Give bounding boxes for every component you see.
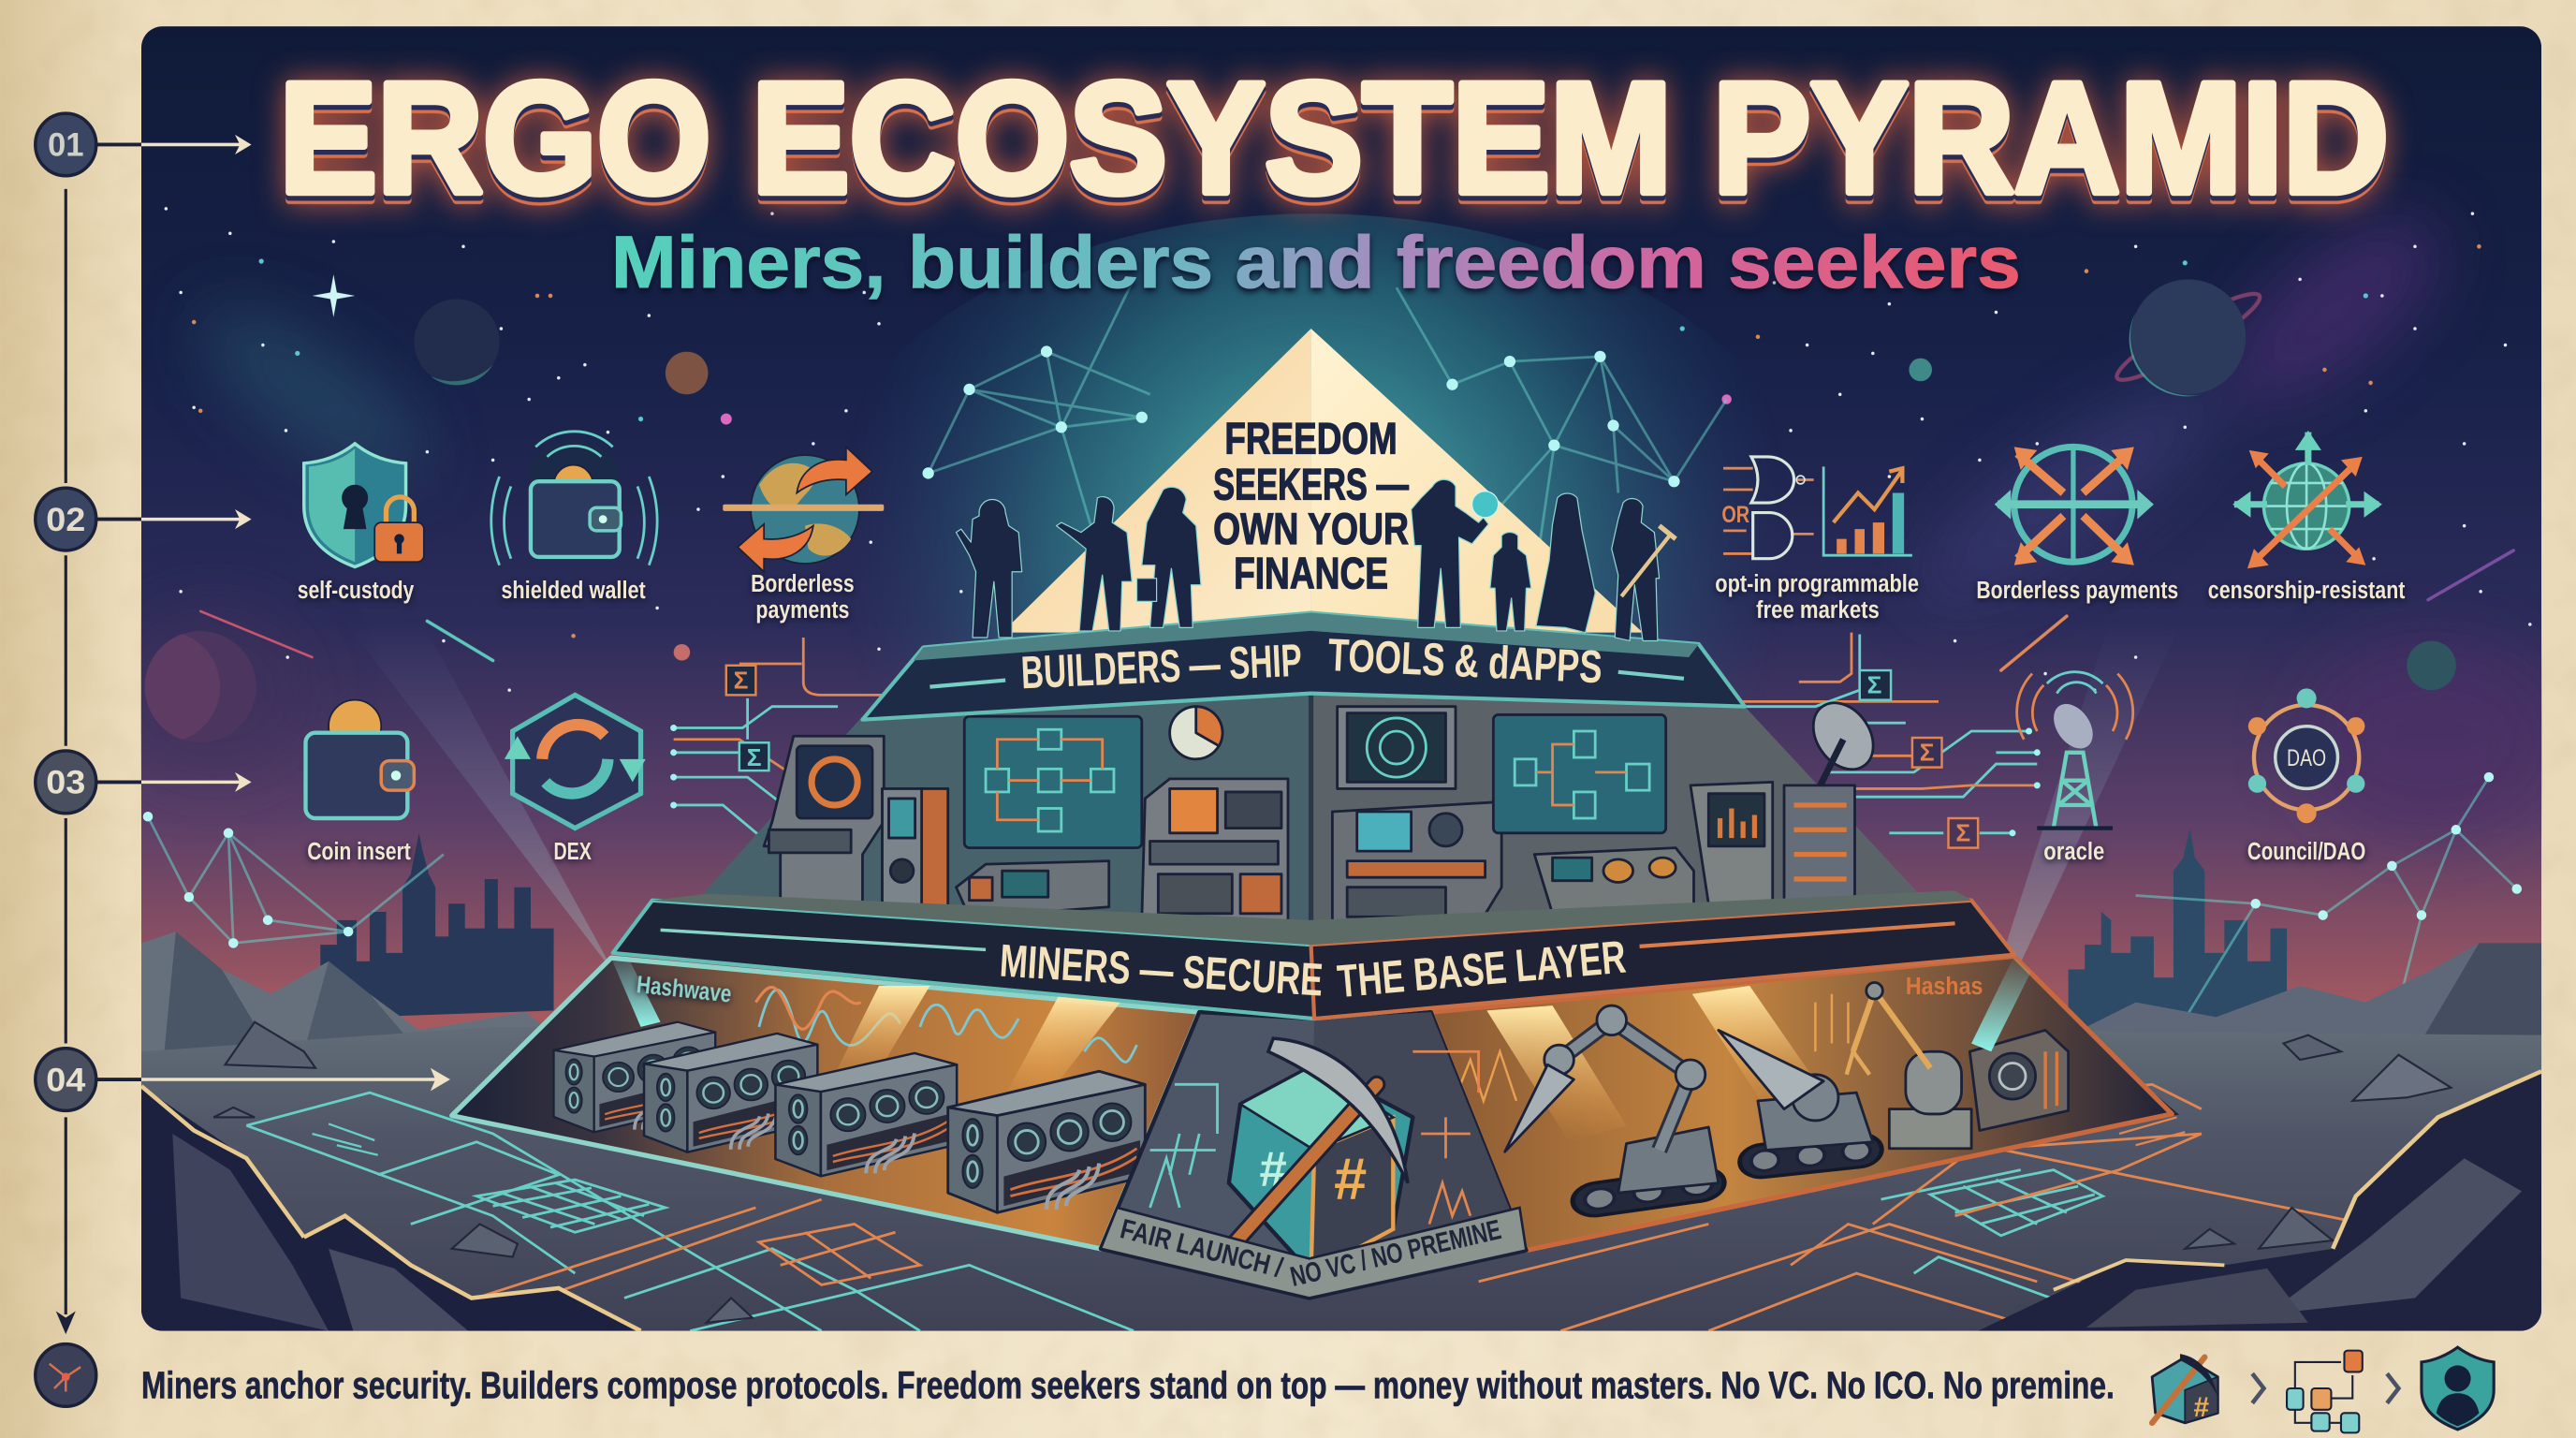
server rig right (1969, 1030, 2069, 1130)
icon: hash cube and pickaxe: # (1334, 1147, 1367, 1212)
circuit traces beside the builders tier (674, 633, 2037, 846)
subtitle: Miners, builders and freedom seekers (611, 221, 2021, 303)
label: self-custody: self-custody (298, 576, 415, 604)
machine: right terminal and server (1690, 782, 1854, 903)
icon: council DAO: DAO (2287, 746, 2326, 771)
small rocks (213, 1022, 2452, 1323)
machine: large flow screen (964, 716, 1142, 848)
footer icons (2152, 1347, 2494, 1432)
apex heading: OWN YOUR (1213, 505, 1409, 554)
machine: gauge and centre console (1142, 707, 1288, 925)
label: borderless payments left (751, 569, 855, 624)
title: ERGO ECOSYSTEM PYRAMID (279, 49, 2389, 226)
sigma nodes: Σ (747, 743, 762, 771)
icon: council DAO (2248, 688, 2364, 823)
tier: freedom seekers apex (1003, 329, 1643, 633)
drilling robot: cone (1719, 1030, 1883, 1180)
timeline: numbered steps (36, 113, 450, 1406)
label: borderless payments right: Borderless payments (1976, 576, 2178, 604)
ground circuit: teal (246, 1093, 2102, 1331)
label: censorship-resistant: censorship-resistant (2208, 576, 2406, 604)
planets (109, 279, 2456, 742)
constellations: lower left and right (148, 777, 2517, 1030)
label: coin insert: Coin insert (307, 837, 411, 865)
apex heading (1213, 414, 1409, 598)
label: borderless payments left: Borderless (751, 569, 855, 597)
sigma nodes: Σ (1920, 739, 1935, 767)
label: hashas: Hashas (1906, 972, 1983, 1000)
tier: miners chamber left (452, 949, 1199, 1249)
tier: miners centre panel (1101, 1012, 1526, 1298)
apex teal glow (904, 213, 1726, 648)
icon: logic gates and chart: OR (1721, 503, 1749, 528)
constellations: around the apex (923, 283, 1728, 539)
icon: DEX swap hexagon (505, 695, 646, 829)
tier: miners band (613, 890, 2014, 1019)
label: oracle: oracle (2043, 837, 2104, 865)
label strip: fair launch (1101, 1208, 1526, 1298)
step 02: 02 (46, 502, 85, 538)
label: shielded wallet: shielded wallet (501, 576, 646, 604)
label: hashwave: Hashwave (636, 970, 733, 1008)
miners heading (998, 932, 1628, 1007)
pyramid (452, 329, 2172, 1298)
connector rail (65, 189, 66, 1314)
icon: oracle tower (2017, 672, 2133, 829)
step 04 (36, 1049, 450, 1110)
tier: builders band (862, 613, 1745, 720)
label: borderless payments left: payments (755, 595, 849, 624)
machine: right console (1332, 801, 1501, 925)
icon group: left lower row (305, 695, 646, 865)
GPU rigs (554, 1022, 1145, 1212)
machine: slanted console (956, 861, 1109, 917)
label: opt-in programmable free markets (1715, 569, 1919, 624)
machine: orange cabinet (883, 788, 948, 907)
icon: hash cube with pickaxe (2152, 1354, 2217, 1423)
city skyline: right (2069, 829, 2287, 1035)
stars (166, 209, 2530, 690)
icon: shield with person (2422, 1347, 2494, 1430)
ground circuit: orange (476, 1084, 2365, 1331)
arrow: rail end (56, 1312, 76, 1334)
icon: censorship-resistant globe (2232, 431, 2382, 568)
apex heading: FREEDOM (1224, 414, 1398, 463)
icon: shielded wallet (491, 432, 657, 565)
icon group: right upper row (1715, 431, 2406, 624)
builders heading: BUILDERS — SHIP (1020, 636, 1303, 698)
step 04: 04 (46, 1062, 86, 1098)
machine: right slanted consoles (1534, 848, 1693, 914)
icon: coin insert wallet (305, 700, 414, 818)
hash waves (759, 990, 1137, 1062)
apex heading: FINANCE (1234, 549, 1388, 598)
chevron (2387, 1373, 2398, 1403)
step 02 (36, 488, 252, 550)
label: Council/DAO: Council/DAO (2247, 837, 2365, 865)
icon: hash cube with pickaxe: # (2193, 1392, 2209, 1423)
icon: flow diagram (2287, 1351, 2363, 1432)
drilling robot: arm (1505, 1005, 1726, 1219)
cyan beam right (1971, 956, 2030, 1051)
icon: borderless globe (723, 447, 884, 572)
silhouettes: freedom seekers (956, 479, 1676, 640)
nebulae (115, 184, 2563, 838)
step 03: 03 (46, 765, 85, 801)
foreground rocks: right (1978, 1071, 2541, 1331)
machine: left terminal (764, 736, 884, 903)
machine: second flow screen (1493, 714, 1666, 833)
foreground rocks: left (141, 1086, 641, 1331)
sigma nodes: Σ (734, 666, 748, 694)
icon: self-custody shield (304, 444, 424, 566)
miners heading: THE BASE LAYER (1336, 932, 1628, 1007)
icon: hash cube and pickaxe: # (1260, 1142, 1287, 1197)
label strip: fair launch: FAIR LAUNCH / (1118, 1213, 1286, 1284)
chevron (2252, 1373, 2263, 1403)
step 03 (36, 751, 252, 814)
step 01: 01 (48, 127, 84, 164)
distant beams (398, 690, 2148, 961)
sigma nodes: Σ (1955, 819, 1970, 847)
icon group: left upper row (298, 432, 884, 624)
sigma nodes: Σ (1867, 671, 1881, 699)
machine: radar screen (1338, 707, 1456, 788)
icon: satellite dish (1801, 692, 1885, 785)
mountains (141, 932, 2541, 1084)
label strip: fair launch: NO VC / NO PREMINE (1287, 1214, 1504, 1293)
icon: borderless arrows (1995, 447, 2154, 565)
step 01 (36, 113, 252, 176)
cyan beam left (611, 949, 661, 1027)
label: DEX: DEX (554, 837, 592, 865)
icon: hash cube and pickaxe (1229, 1038, 1412, 1273)
step 05 icon (36, 1344, 96, 1406)
miners heading: MINERS — SECURE (998, 936, 1325, 1006)
label: opt-in programmable free markets: opt-in programmable (1715, 569, 1919, 597)
city skyline: left (320, 833, 554, 1019)
sigma nodes (726, 666, 1978, 848)
ground (141, 1027, 2541, 1331)
icon: logic gates and chart (1721, 457, 1912, 559)
shooting stars (200, 550, 2513, 670)
tier: miners chamber right (1431, 956, 2172, 1251)
icon group: right lower row (2017, 672, 2365, 865)
apex heading: SEEKERS — (1213, 461, 1409, 510)
robot arm with claw (1847, 983, 1971, 1149)
label: opt-in programmable free markets: free markets (1756, 595, 1880, 624)
builders heading: TOOLS & dAPPS (1327, 630, 1603, 693)
tier: builders body (701, 690, 1921, 930)
